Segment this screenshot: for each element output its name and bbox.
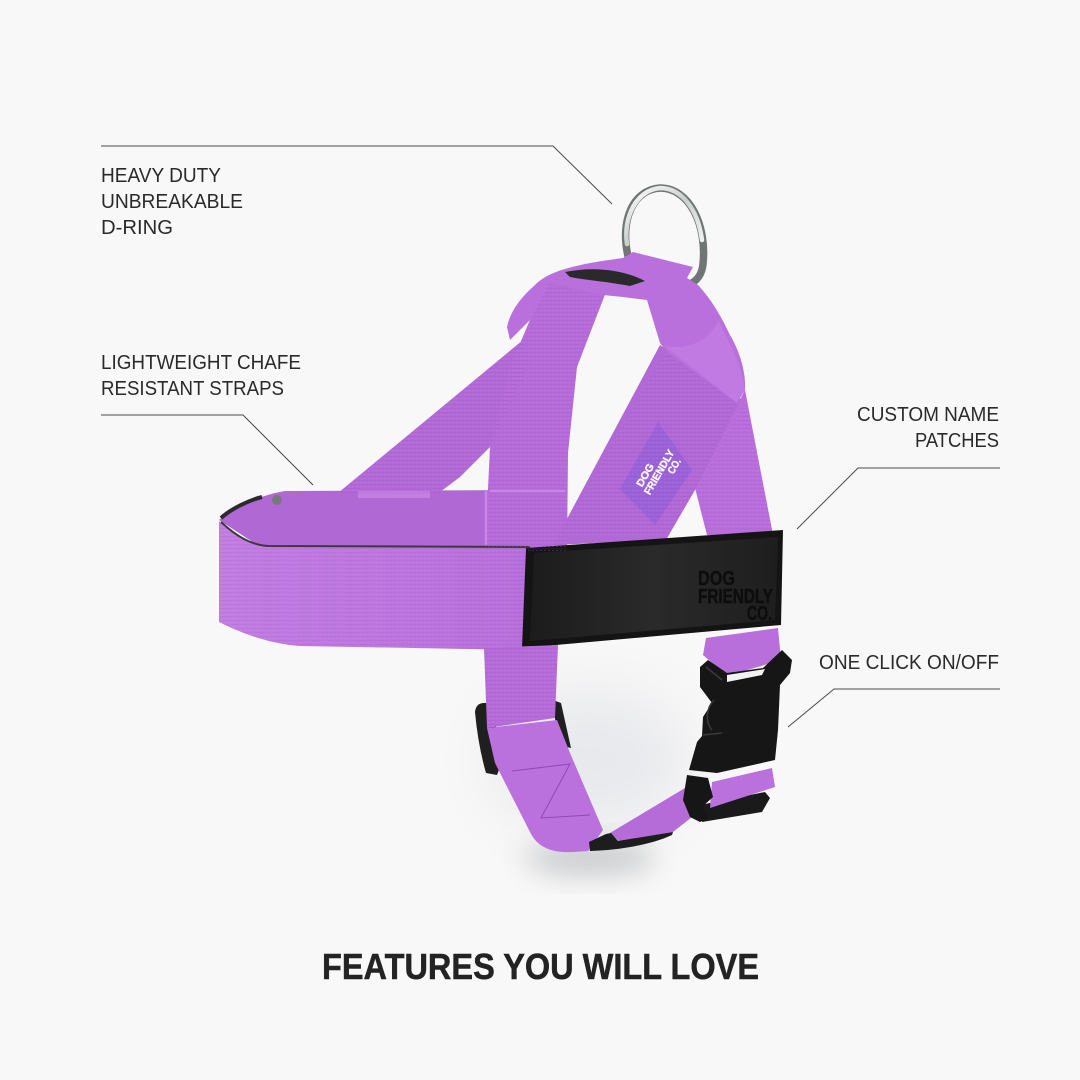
label: D-ring: HEAVY DUTY bbox=[101, 165, 221, 187]
rubber patch bbox=[620, 422, 692, 525]
label: straps bbox=[101, 352, 301, 400]
rear metal hardware bbox=[272, 495, 282, 505]
harness illustration bbox=[219, 188, 792, 852]
band top edge bbox=[221, 522, 530, 547]
label: D-ring bbox=[101, 165, 243, 239]
label: D-ring: UNBREAKABLE bbox=[101, 191, 243, 213]
buckle strap lower bbox=[710, 768, 775, 808]
buckle highlights bbox=[703, 667, 722, 735]
black leather patch bbox=[522, 530, 783, 648]
lower vertical strap bbox=[484, 645, 558, 728]
vertical strap bbox=[485, 282, 606, 552]
patch wordmark: CO. bbox=[747, 603, 772, 625]
loop fold highlight bbox=[663, 320, 745, 403]
top loop bbox=[507, 252, 745, 403]
leader line: D-ring bbox=[101, 146, 612, 204]
rear band dark edge bbox=[221, 497, 262, 518]
leader line: buckle bbox=[788, 689, 1000, 727]
leader line: name patches bbox=[797, 468, 1000, 529]
buckle strap upper bbox=[703, 628, 781, 676]
label: D-ring: D-RING bbox=[101, 217, 173, 239]
diagonal strap bbox=[553, 345, 741, 545]
patch logo: FRIENDLY bbox=[642, 448, 677, 497]
weave texture overlay bbox=[219, 284, 773, 728]
loop dark opening bbox=[565, 269, 645, 286]
label: straps: LIGHTWEIGHT CHAFE bbox=[101, 352, 301, 374]
back strap bbox=[338, 340, 530, 495]
right strap bbox=[695, 390, 773, 535]
patch logo: DOG bbox=[634, 462, 657, 489]
icon: D-ring bbox=[626, 188, 704, 284]
thin lower strap bbox=[610, 788, 692, 842]
rear band inner bbox=[219, 490, 560, 560]
vertical strap seam bbox=[486, 491, 565, 545]
leader line: straps bbox=[101, 415, 313, 485]
patch logo: CO. bbox=[665, 456, 684, 476]
label: buckle: ONE CLICK ON/OFF bbox=[819, 652, 999, 674]
icon: side release buckle bbox=[683, 650, 792, 822]
slider buckle bbox=[475, 700, 571, 775]
patch wordmark bbox=[698, 568, 773, 625]
title: FEATURES YOU WILL LOVE bbox=[322, 946, 759, 987]
patch wordmark: DOG bbox=[698, 568, 735, 590]
patch wordmark: FRIENDLY bbox=[698, 586, 773, 608]
label: straps: RESISTANT STRAPS bbox=[101, 378, 284, 400]
label: name patches: PATCHES bbox=[915, 430, 999, 452]
label: name patches: CUSTOM NAME bbox=[857, 404, 999, 426]
label: name patches bbox=[857, 404, 999, 452]
front band bbox=[219, 521, 530, 650]
buckle lower frame bbox=[700, 792, 770, 822]
soft shadow under harness bbox=[490, 690, 690, 876]
fold stitching bbox=[512, 764, 590, 818]
lower folded strap bbox=[487, 720, 603, 852]
rear band stitched tab bbox=[358, 491, 430, 498]
lower black keeper bbox=[589, 832, 673, 851]
